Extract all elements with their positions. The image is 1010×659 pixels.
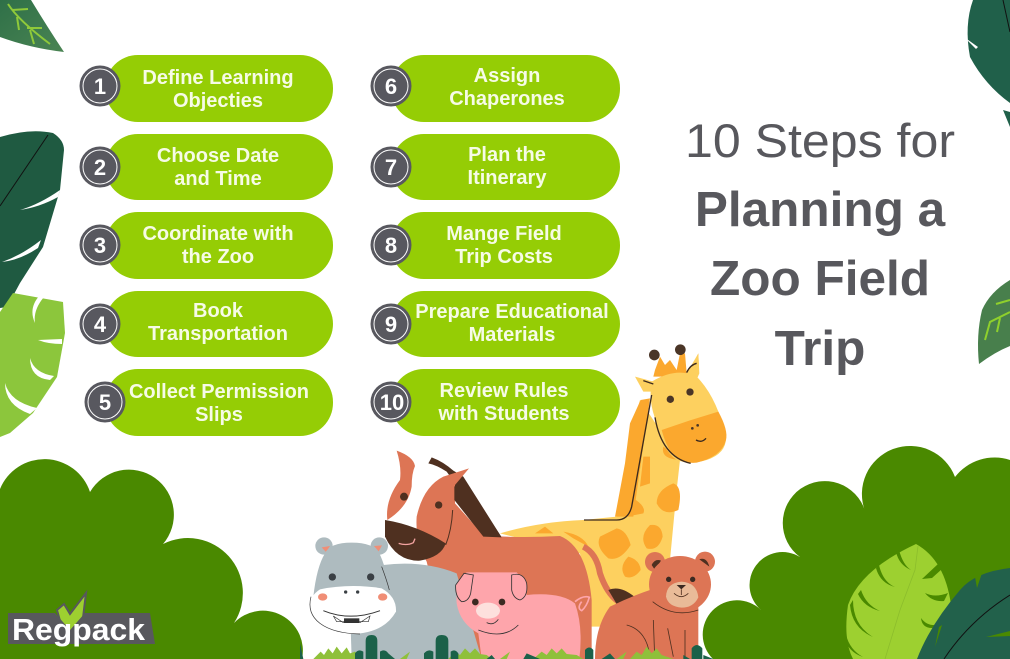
step 6: Chaperones	[449, 88, 565, 110]
leaf: dark green	[917, 568, 1010, 659]
step 2: and Time	[174, 168, 262, 190]
leaf: top left	[0, 0, 64, 52]
label: Define Learning	[142, 67, 294, 89]
step 10	[370, 369, 620, 436]
title: Planning a	[695, 182, 946, 237]
horse	[385, 451, 634, 659]
step 3: 3	[94, 233, 106, 258]
title	[685, 114, 955, 376]
step 9: Materials	[469, 324, 555, 346]
title: 10 Steps for	[685, 114, 955, 167]
bear	[595, 552, 715, 659]
leaf: top right	[964, 0, 1010, 127]
bush: bottom left	[0, 459, 303, 659]
step 10: Review Rules	[440, 380, 568, 402]
number badge	[80, 66, 120, 106]
step 1	[80, 55, 333, 122]
step 9: Prepare Educational	[415, 301, 609, 323]
step 4	[80, 291, 333, 357]
step 8: Trip Costs	[455, 246, 553, 268]
step 10: with Students	[437, 403, 570, 425]
number badge: 1	[94, 74, 106, 99]
icon: check mark	[57, 593, 86, 636]
title: Trip	[775, 321, 865, 376]
step 8: Mange Field	[446, 223, 562, 245]
step 4: Transportation	[148, 323, 288, 345]
step 6	[370, 55, 620, 122]
pig	[456, 572, 589, 659]
step 3	[80, 212, 333, 279]
step 2	[80, 134, 333, 200]
leaf: light left	[0, 293, 65, 437]
step 8: 8	[385, 233, 397, 258]
giraffe	[500, 344, 726, 627]
step 10: 10	[380, 390, 404, 415]
leaf: right middle	[978, 280, 1010, 364]
animals illustration	[300, 344, 726, 659]
step 4: Book	[193, 300, 244, 322]
wordmark: Regpack	[12, 612, 146, 647]
step 7	[370, 134, 620, 200]
step 7: 7	[385, 155, 397, 180]
bush: bottom right	[703, 446, 1010, 659]
step 2: Choose Date	[157, 145, 279, 167]
step 9: 9	[385, 312, 397, 337]
step 8	[370, 212, 620, 279]
leaf: light green monstera	[844, 544, 951, 659]
logo: Regpack	[8, 593, 155, 647]
step 3: Coordinate with	[142, 223, 294, 245]
step 7: Plan the	[468, 144, 546, 166]
logo backing band	[8, 613, 155, 644]
pill	[105, 55, 333, 122]
step 5	[84, 369, 333, 436]
step 6: Assign	[474, 65, 540, 87]
step 2: 2	[94, 155, 106, 180]
step 7: Itinerary	[468, 167, 547, 189]
step 4: 4	[94, 312, 107, 337]
hippo	[309, 537, 482, 659]
step 5: 5	[99, 390, 111, 415]
step 9	[370, 291, 620, 357]
grass	[300, 635, 713, 659]
step 5: Slips	[195, 404, 243, 426]
step 6: 6	[385, 74, 397, 99]
step 5: Collect Permission	[129, 381, 309, 403]
title: Zoo Field	[710, 251, 930, 306]
step 3: the Zoo	[182, 246, 254, 268]
label: Objecties	[173, 90, 263, 112]
leaf: dark left	[0, 131, 64, 308]
